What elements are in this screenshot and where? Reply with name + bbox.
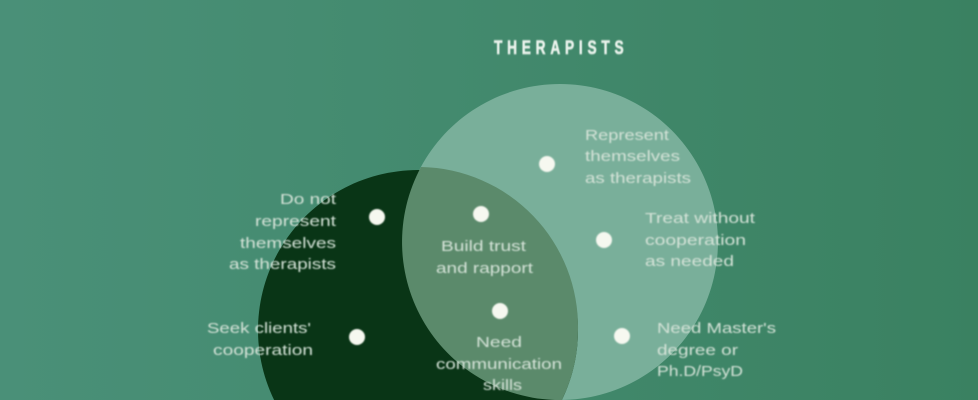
text: need master's degree or ph.d/psyd [657, 320, 776, 380]
venn circles [258, 84, 718, 400]
heading: therapists: THERAPISTS [494, 37, 624, 59]
text: seek clients' cooperation: cooperation [213, 342, 313, 359]
text: treat without cooperation as needed: Treat without [645, 210, 756, 227]
circle: therapists [402, 84, 718, 400]
text: do not represent themselves as therapists [229, 191, 337, 273]
text: need master's degree or ph.d/psyd: Ph.D/PsyD [657, 363, 743, 380]
text: do not represent themselves as therapists: themselves [240, 235, 336, 252]
text: do not represent themselves as therapists: Do not [280, 191, 337, 208]
text: represent themselves as therapists [585, 127, 691, 187]
text: treat without cooperation as needed: as needed [645, 253, 734, 270]
text: need master's degree or ph.d/psyd: degree or [657, 342, 738, 359]
circle: second group [258, 170, 578, 400]
text: seek clients' cooperation: Seek clients' [207, 320, 311, 337]
labels [207, 127, 776, 394]
text: build trust and rapport [436, 238, 534, 277]
text: represent themselves as therapists: Represent [585, 127, 670, 144]
text: treat without cooperation as needed: cooperation [645, 232, 746, 249]
text: need communication skills: communication [436, 356, 562, 373]
marker dots [349, 156, 630, 345]
text: do not represent themselves as therapists: represent [255, 213, 337, 230]
text: need communication skills: skills [483, 377, 522, 394]
circle overlap [402, 167, 578, 400]
text: seek clients' cooperation [207, 320, 313, 359]
text: need master's degree or ph.d/psyd: Need Master's [657, 320, 776, 337]
text: represent themselves as therapists: as therapists [585, 170, 691, 187]
text: need communication skills: Need [476, 334, 522, 351]
text: build trust and rapport: and rapport [436, 260, 534, 277]
text: represent themselves as therapists: themselves [585, 148, 680, 165]
text: need communication skills [436, 334, 562, 394]
text: build trust and rapport: Build trust [441, 238, 527, 255]
text: do not represent themselves as therapists: as therapists [229, 256, 336, 273]
text: treat without cooperation as needed [645, 210, 756, 270]
